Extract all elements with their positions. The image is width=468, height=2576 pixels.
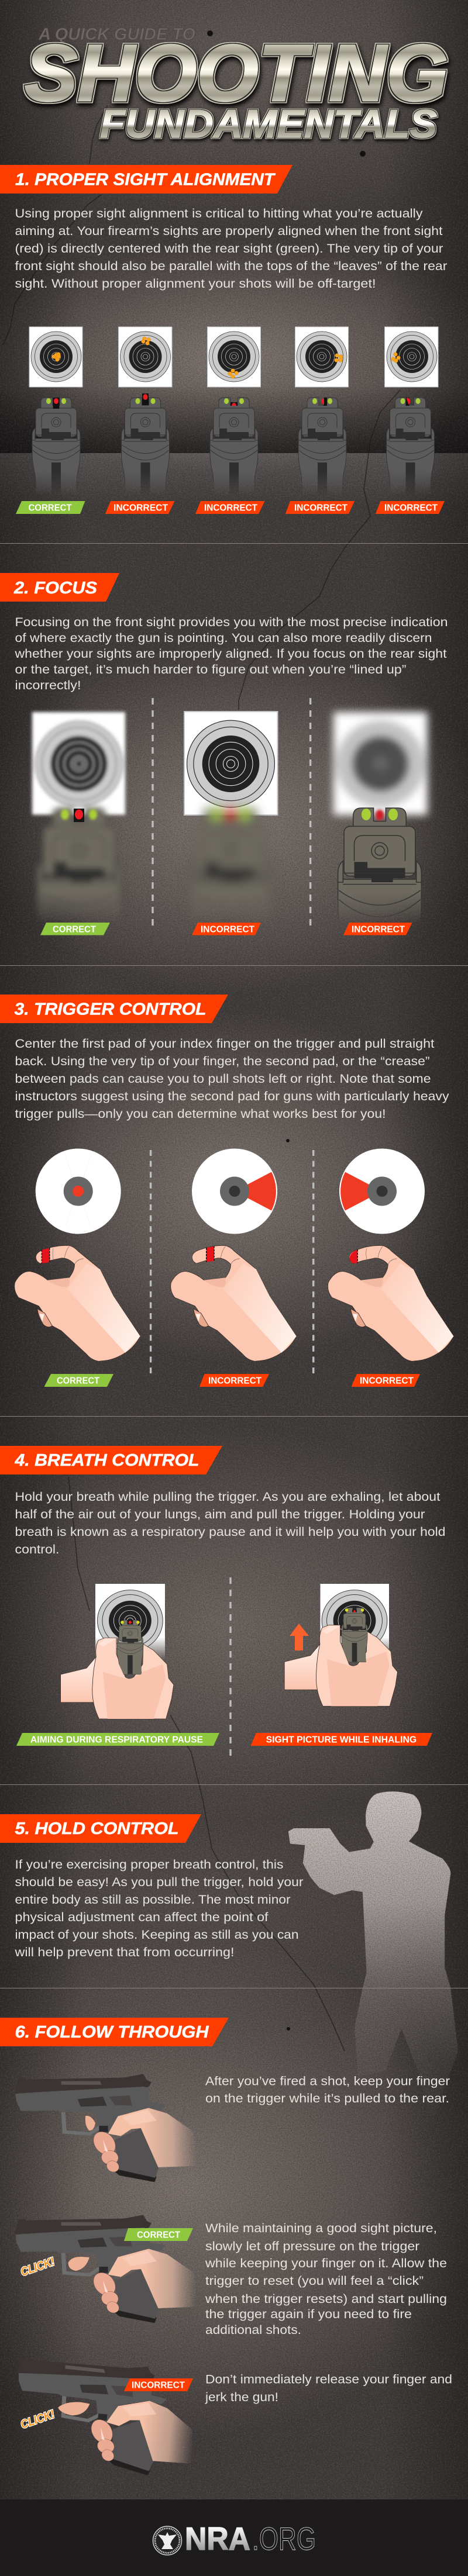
text block: follow through 2: the trigger again if you need to fire — [205, 2308, 412, 2321]
label: incorrect 2 — [351, 1374, 420, 1387]
silhouette of shooter — [288, 1791, 458, 2128]
title: Shooting: SHOOTING — [25, 29, 448, 118]
text block: section 3: trigger pulls—only you can determine what works best for you! — [15, 1107, 386, 1121]
wordmark: NRA — [185, 2520, 250, 2557]
seal — [153, 2526, 181, 2555]
shooting hands — [61, 1638, 174, 1719]
label: aiming during respiratory pause — [16, 1733, 219, 1746]
label: correct: CORRECT — [57, 1376, 99, 1386]
text block: follow through 1 — [205, 2074, 450, 2105]
dashed separators — [151, 1150, 314, 1377]
label: correct — [40, 923, 110, 935]
section 6: follow through — [0, 2018, 452, 2480]
text block: follow through 3: Don’t immediately release your finger and — [205, 2373, 452, 2387]
title: Fundamentals: FUNDAMENTALS — [100, 102, 437, 146]
heading: section 6: 6. FOLLOW THROUGH — [15, 2023, 209, 2042]
heading: section 4 — [0, 1446, 222, 1475]
label: incorrect 4 — [285, 501, 355, 514]
text block: section 4 — [15, 1490, 446, 1556]
label: incorrect 2: INCORRECT — [113, 503, 168, 513]
text block: section 2: of where exactly the gun is pointing. You can also more readily discern — [15, 631, 432, 645]
target paper — [95, 1584, 165, 1660]
text block: section 3: instructors suggest using the second pad for guns with particularly heavy — [15, 1090, 449, 1103]
section 4: breath control — [0, 1446, 446, 1756]
pad diagram: incorrect, tip — [192, 1148, 277, 1234]
section 2: focus — [0, 573, 447, 935]
pad diagram: incorrect, crease — [339, 1148, 425, 1234]
text block: follow through 3 — [205, 2373, 452, 2404]
title block — [25, 25, 448, 146]
label: correct — [124, 2228, 193, 2241]
hand: correct pad — [15, 1245, 140, 1361]
pistol rear view 3: front sight low — [210, 398, 258, 498]
target 3: low group — [207, 317, 261, 387]
hand: incorrect tip — [328, 1245, 453, 1361]
text block: follow through 2: when the trigger resets) and start pulling — [205, 2292, 447, 2306]
label: incorrect 3 — [195, 501, 264, 514]
sharp target — [184, 712, 277, 815]
heading: section 6 — [0, 2018, 229, 2046]
text block: section 5: entire body as still as possible. The most minor — [15, 1893, 291, 1907]
label: incorrect 1 — [199, 1374, 269, 1387]
label: incorrect A — [192, 923, 261, 935]
blurred target — [32, 712, 125, 815]
text block: section 1: (red) is directly centered with the rear sight (green). The very tip of your — [15, 242, 443, 255]
text block: follow through 1: After you’ve fired a shot, keep your finger — [205, 2074, 450, 2088]
target 5: left group — [385, 317, 438, 387]
text block: section 1: sight. Without proper alignment your shots will be off-target! — [15, 277, 376, 291]
heading: section 1 — [0, 165, 292, 194]
arrow: up — [290, 1624, 309, 1650]
label: sight picture while inhaling: SIGHT PICTURE WHILE INHALING — [266, 1735, 417, 1745]
label: correct — [44, 1374, 113, 1387]
pistol rear view 1: correct — [32, 398, 80, 498]
heavily blurred pistol — [188, 800, 273, 916]
pistol rear view 4: front sight right — [298, 398, 346, 498]
label: incorrect 2: INCORRECT — [360, 1376, 414, 1386]
text block: section 5 — [14, 1858, 303, 1959]
label: sight picture while inhaling — [250, 1733, 432, 1746]
title kicker: A QUICK GUIDE TO — [38, 25, 195, 44]
text block: section 3: Center the first pad of your index finger on the trigger and pull straight — [15, 1037, 435, 1051]
label: incorrect B: INCORRECT — [352, 925, 405, 934]
heading: section 2: 2. FOCUS — [13, 579, 98, 598]
text block: section 1: Using proper sight alignment is critical to hitting what you’re actually — [15, 207, 423, 220]
text block: section 5: should be easy! As you pull the trigger, hold your — [15, 1876, 303, 1889]
label: incorrect B — [343, 923, 412, 935]
blurred pistol with sharp front sight — [34, 803, 122, 919]
label: incorrect 5: INCORRECT — [384, 503, 438, 513]
label: aiming during respiratory pause: AIMING DURING RESPIRATORY PAUSE — [30, 1735, 203, 1745]
text block: section 5: physical adjustment can affect the point of — [15, 1911, 269, 1924]
target paper — [321, 1584, 389, 1660]
text block: section 4: Hold your breath while pulling the trigger. As you are exhaling, let about — [15, 1490, 441, 1504]
label: incorrect 4: INCORRECT — [294, 503, 347, 513]
pistol pointing high — [342, 1608, 367, 1662]
dashed separator — [229, 1577, 232, 1756]
column 1: focused on front sight — [32, 712, 125, 983]
pistol rear view 2: front sight high — [122, 393, 170, 498]
text block: section 5: impact of your shots. Keeping as still as you can — [15, 1928, 299, 1942]
label: incorrect A: INCORRECT — [201, 925, 254, 934]
label: incorrect 2 — [105, 501, 174, 514]
text block: section 2 — [14, 616, 448, 692]
illustration: aiming during respiratory pause — [61, 1584, 174, 1719]
text block: follow through 2: trigger to reset (you will feel a “click” — [205, 2274, 424, 2288]
text block: follow through 1: on the trigger while it’s pulled to the rear. — [205, 2092, 449, 2105]
very blurred target — [333, 712, 427, 815]
label: incorrect 5 — [376, 501, 445, 514]
text block: section 4: control. — [15, 1543, 60, 1556]
label: correct: CORRECT — [28, 503, 72, 513]
text block: follow through 2: while keeping your finger on it. Allow the — [205, 2257, 447, 2270]
heading: section 3: 3. TRIGGER CONTROL — [14, 1000, 206, 1018]
column 2: focused on target — [184, 712, 277, 983]
logo: NRA.ORG — [153, 2520, 316, 2557]
pistol in hand — [117, 1620, 143, 1674]
label: correct: CORRECT — [137, 2230, 180, 2240]
label: correct — [16, 501, 85, 514]
target 4: right group — [295, 317, 349, 387]
column 3: focused on rear sight — [333, 712, 427, 983]
text block: section 5: will help prevent that from occurring! — [14, 1946, 235, 1959]
text block: section 2: Focusing on the front sight provides you with the most precise indication — [15, 616, 448, 629]
text block: follow through 3: jerk the gun! — [205, 2391, 278, 2404]
text block: follow through 2: additional shots. — [205, 2323, 301, 2337]
logo: NRA.ORG: .ORG — [252, 2520, 316, 2557]
text block: section 2: whether your sights are improperly aligned. If you focus on the rear sight — [14, 647, 447, 661]
label: incorrect 1: INCORRECT — [208, 1376, 261, 1386]
heading: section 1: 1. PROPER SIGHT ALIGNMENT — [15, 171, 276, 189]
sharp rear sight pistol — [337, 807, 422, 918]
section 3: trigger control — [0, 995, 453, 1387]
label: incorrect: INCORRECT — [132, 2381, 185, 2390]
label: correct: CORRECT — [53, 925, 96, 934]
text block: follow through 2 — [205, 2222, 447, 2337]
text block: follow through 2: slowly let off pressure on the trigger — [205, 2240, 419, 2253]
dashed separators — [153, 698, 311, 926]
heading: section 5 — [0, 1814, 201, 1843]
heading: section 2 — [0, 573, 119, 602]
section dividers — [0, 544, 468, 1988]
hand: incorrect pad — [171, 1245, 297, 1361]
target 2: high group — [118, 317, 172, 387]
text block: section 4: half of the air out of your lungs, aim and pull the trigger. Holding your — [15, 1508, 425, 1521]
click callout 1: CLICK! — [19, 2255, 57, 2279]
pistol rear view 5: front sight left — [386, 398, 434, 498]
pistol 3: jerked — [8, 2353, 202, 2480]
section 5: hold control — [0, 1814, 303, 1959]
shooting hands raised — [284, 1625, 398, 1706]
illustration: sight picture while inhaling — [284, 1584, 398, 1706]
section 1: proper sight alignment — [0, 165, 447, 514]
pistol 2: trigger reset — [14, 2215, 198, 2323]
click callout 2: CLICK! — [19, 2408, 57, 2432]
text block: section 4: breath is known as a respiratory pause and it will help you with your hold — [15, 1525, 446, 1539]
text block: section 3: back. Using the very tip of your finger, the second pad, or the “crease” — [15, 1055, 430, 1068]
text block: section 2: incorrectly! — [15, 679, 81, 692]
heading: section 3 — [0, 995, 228, 1023]
heading: section 5: 5. HOLD CONTROL — [15, 1819, 179, 1838]
text block: section 5: If you’re exercising proper breath control, this — [15, 1858, 283, 1871]
pad diagram: correct — [36, 1148, 121, 1234]
label: incorrect 3: INCORRECT — [204, 503, 257, 513]
pistol 1: finger on trigger — [14, 2074, 198, 2182]
label: incorrect — [124, 2378, 193, 2391]
text block: section 1: aiming at. Your firearm’s sights are properly aligned when the front sight — [15, 225, 443, 238]
target 1: centered group — [29, 317, 82, 387]
heading: section 4: 4. BREATH CONTROL — [14, 1451, 199, 1470]
text block: section 3: between pads can cause you to pull shots left or right. Note that some — [15, 1072, 431, 1086]
text block: section 1: front sight should also be parallel with the tops of the “leaves” of the rear — [15, 260, 447, 273]
text block: section 2: or the target, it’s much harder to figure out when you’re “lined up” — [15, 663, 407, 676]
text block: section 3 — [15, 1037, 449, 1121]
text block: follow through 2: While maintaining a good sight picture, — [205, 2222, 437, 2235]
footer band — [0, 2499, 468, 2576]
text block: section 1 — [15, 207, 447, 291]
